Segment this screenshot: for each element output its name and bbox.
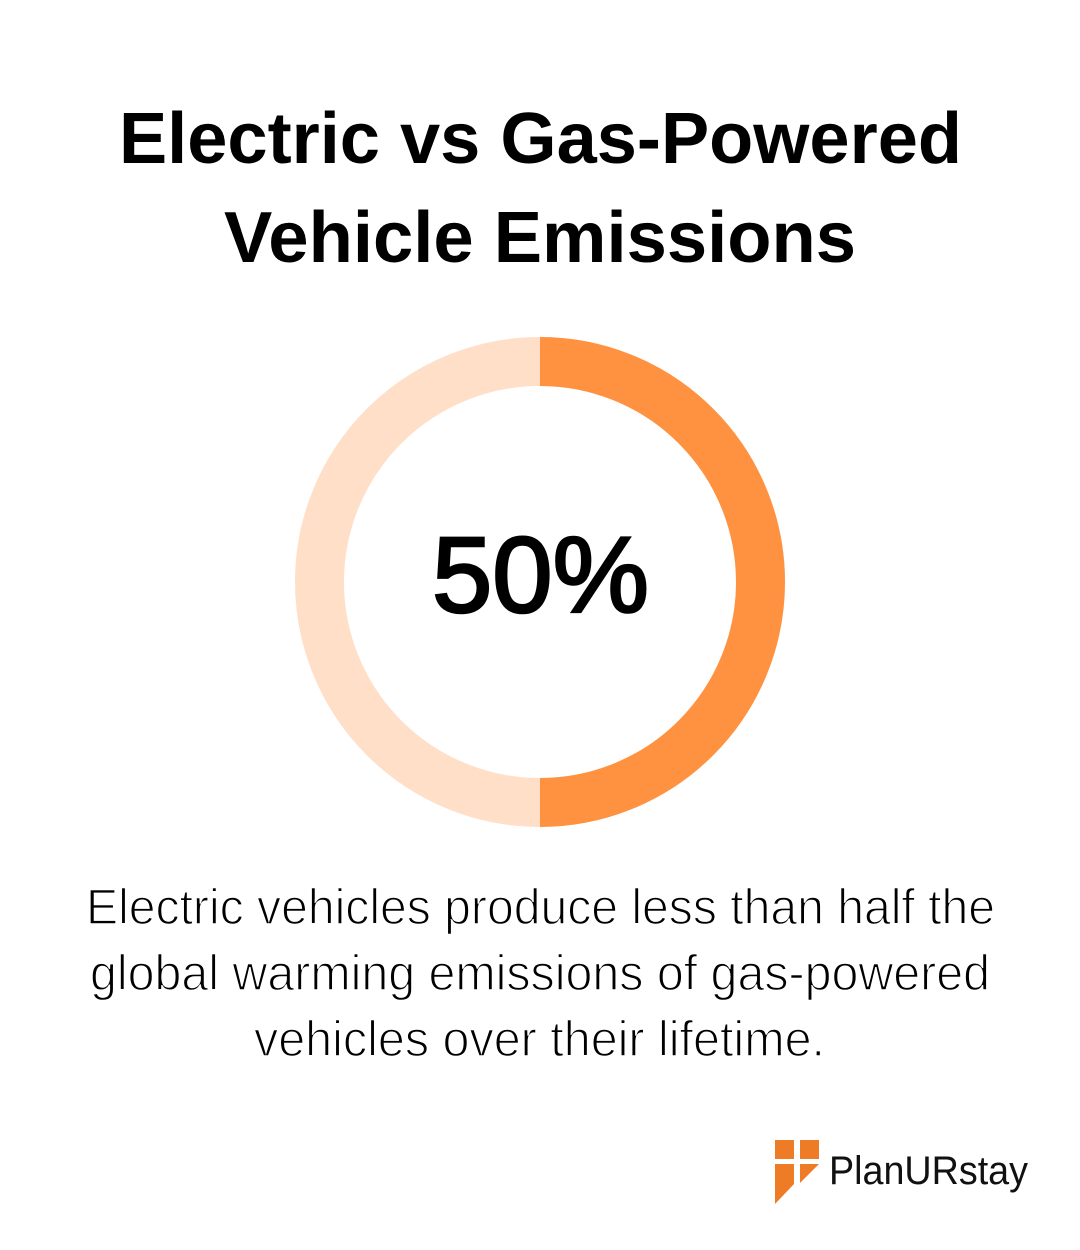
donut value: 50%: [432, 514, 649, 635]
title: Vehicle Emissions: [224, 198, 856, 278]
description text: Electric vehicles produce less than half the: [86, 879, 995, 935]
description text: global warming emissions of gas-powered: [90, 945, 990, 1001]
logo: PlanURstay: [775, 1140, 1028, 1204]
title: [119, 99, 962, 278]
description text: [86, 879, 995, 1067]
title: Electric vs Gas-Powered: [119, 99, 962, 179]
donut chart: 50%: [320, 362, 760, 802]
description text: vehicles over their lifetime.: [254, 1011, 825, 1067]
logo wordmark: PlanURstay: [829, 1149, 1028, 1193]
logo icon: [775, 1140, 819, 1204]
